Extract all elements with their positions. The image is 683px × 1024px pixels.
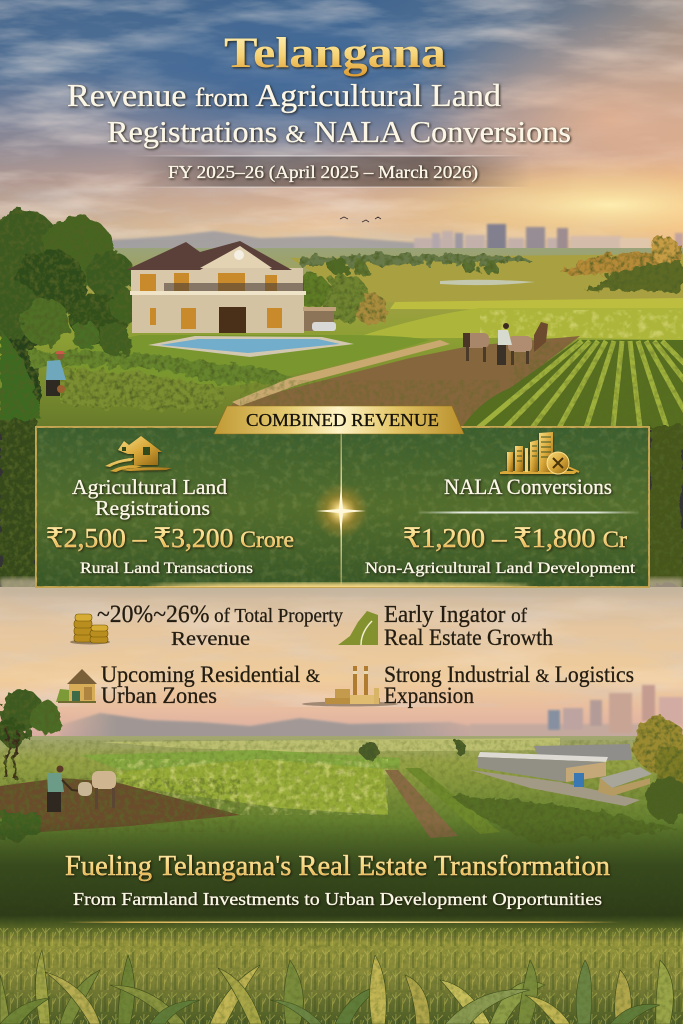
distant city skyline (414, 224, 683, 252)
crop rows (460, 340, 683, 430)
far fields (290, 254, 683, 302)
highlight: early indicator: Early Ingator of (384, 602, 527, 628)
footer heading: Fueling Telangana's Real Estate Transformation (65, 851, 610, 882)
background: lower landscape (0, 685, 683, 936)
background: lower sky (0, 578, 683, 737)
left column: agricultural land registrations: Agricultural Land (72, 475, 227, 499)
highlight: share of property revenue (70, 601, 343, 650)
icon: factory with chimneys (302, 666, 398, 706)
highlight: industrial and logistics (302, 662, 634, 708)
banner: combined revenue (214, 406, 464, 434)
fiscal year band (130, 156, 531, 188)
left farmer (46, 351, 66, 396)
panel: combined revenue (36, 406, 649, 589)
fiscal year band: FY 2025–26 (April 2025 – March 2026) (168, 162, 478, 182)
subtitle line 1: Revenue from Agricultural Land (67, 77, 501, 113)
highlight: residential and urban zones (56, 662, 320, 708)
banner: combined revenue: COMBINED REVENUE (246, 410, 439, 430)
icon: coin stacks (70, 614, 110, 644)
villa (126, 241, 336, 333)
highlight: residential and urban zones: Upcoming Residential & (101, 662, 320, 687)
left column: agricultural land registrations: Registrations (95, 496, 210, 520)
right column: NALA conversions: NALA Conversions (444, 474, 612, 499)
left column: agricultural land registrations: Rural Land Transactions (80, 560, 253, 577)
warehouses (470, 744, 652, 806)
right meadow and trees (0, 690, 680, 845)
footer subheading: From Farmland Investments to Urban Development Opportunities (73, 889, 602, 909)
highlight: industrial and logistics: Strong Industrial & Logistics (384, 662, 634, 687)
dirt field and path (232, 336, 580, 430)
right tree (633, 718, 683, 822)
highlight: share of property revenue: Revenue (171, 628, 250, 650)
oxen and ploughman (463, 322, 548, 365)
lawn (60, 335, 430, 400)
highlight: early indicator: Real Estate Growth (384, 625, 553, 650)
right column: NALA conversions (365, 432, 640, 577)
icon: golden towers with coin (500, 432, 579, 474)
highlight: share of property revenue: ~20%~26% of Total Property (97, 601, 343, 628)
metric: agricultural revenue range: ₹2,500 – ₹3,200 Crore (46, 523, 294, 553)
distant hills (110, 231, 420, 252)
left ploughed soil (0, 778, 240, 832)
mid crop field (355, 308, 683, 340)
background: upper landscape (0, 210, 683, 590)
background: foreground corn field (0, 915, 683, 1024)
metric: NALA revenue range: ₹1,200 – ₹1,800 Cr (403, 523, 627, 553)
footer: closing message (65, 851, 620, 923)
lower skyline (470, 685, 683, 740)
title: Telangana: Telangana (224, 30, 446, 77)
icon: small yellow house (56, 669, 97, 703)
lower hills (60, 713, 520, 740)
highlight: industrial and logistics: Expansion (384, 683, 474, 708)
subtitle line 2: Registrations & NALA Conversions (107, 114, 571, 149)
bright crop field (115, 759, 388, 815)
distant tree lines (295, 236, 683, 326)
dirt path (385, 770, 458, 838)
highlight: early indicator (338, 602, 553, 650)
title block (67, 30, 571, 188)
highlight: residential and urban zones: Urban Zones (101, 683, 217, 708)
central divider with star glow (313, 434, 369, 586)
lower farmer and ox (47, 766, 116, 812)
garden hedges (0, 321, 295, 430)
highlights (56, 601, 634, 708)
background: upper sky (0, 0, 683, 255)
right column: NALA conversions: Non-Agricultural Land Development (365, 560, 636, 577)
left column: agricultural land registrations (46, 436, 294, 577)
left forest (0, 210, 141, 430)
far bands (100, 738, 560, 752)
icon: green rising road arrow (338, 611, 378, 645)
icon: farmhouse on fields (105, 436, 172, 472)
pool (148, 336, 354, 357)
forest edges beside panel (0, 420, 683, 590)
